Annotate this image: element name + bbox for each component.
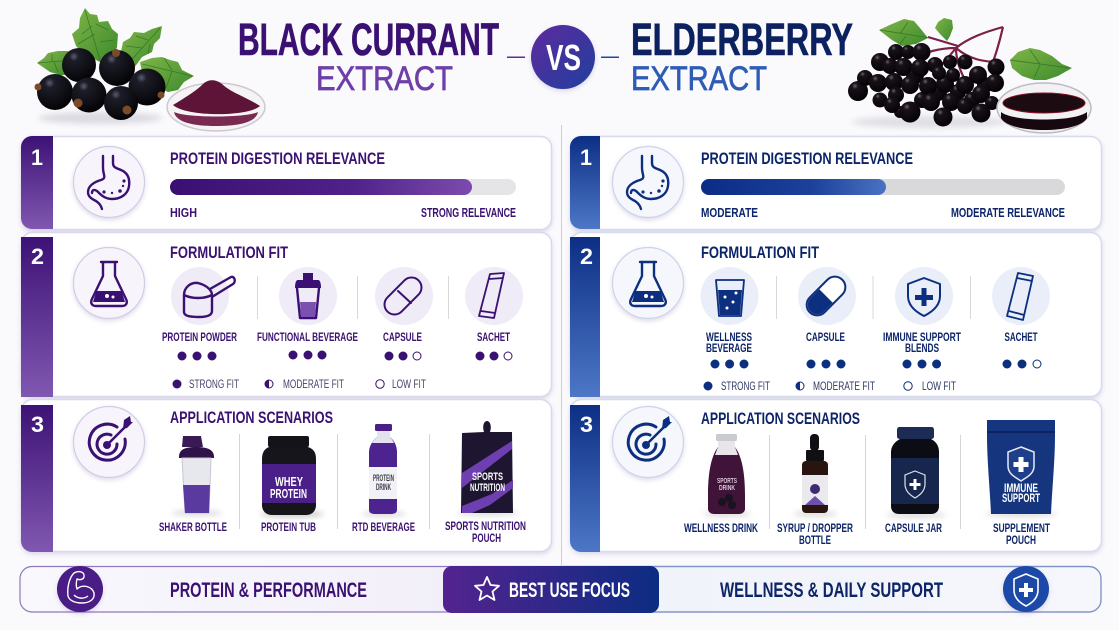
progress bar: moderate — [701, 179, 1065, 195]
product: sports nutrition pouch: POUCH — [472, 531, 501, 545]
icon: flask — [74, 248, 144, 318]
product: supplement pouch — [985, 420, 1057, 547]
legend: LOW FIT — [392, 377, 426, 391]
item: functional beverage — [257, 267, 358, 360]
number tab 2 — [570, 237, 600, 397]
product: RTD beverage: PROTEIN — [373, 473, 394, 484]
product: sports nutrition pouch: SPORTS NUTRITION — [445, 519, 526, 533]
VS badge: VS — [546, 37, 581, 78]
item: sachet — [992, 267, 1050, 368]
center tab: best use focus: BEST USE FOCUS — [509, 579, 630, 602]
product: syrup dropper bottle — [777, 434, 853, 547]
item: capsule: CAPSULE — [383, 330, 422, 344]
product: syrup dropper bottle: BOTTLE — [799, 533, 831, 547]
product: protein tub — [260, 436, 324, 534]
title: Black Currant Extract: BLACK CURRANT — [238, 14, 499, 65]
product: RTD beverage: DRINK — [376, 482, 391, 493]
legend: MODERATE FIT — [283, 377, 344, 391]
product: wellness drink: WELLNESS DRINK — [684, 521, 758, 535]
panel: elderberry application scenarios — [570, 400, 1102, 552]
number tab 3: 3 — [31, 412, 44, 437]
panel: black currant application scenarios — [21, 400, 552, 552]
bar label: strong relevance: STRONG RELEVANCE — [421, 205, 516, 220]
panel: black currant protein digestion relevance — [21, 136, 552, 230]
icon: flexed arm — [57, 566, 103, 612]
title: Black Currant Extract — [238, 14, 499, 98]
product: syrup dropper bottle: SYRUP / DROPPER — [777, 521, 853, 535]
number tab 1: 1 — [580, 145, 592, 170]
legend — [172, 377, 426, 391]
product: capsule jar: CAPSULE JAR — [885, 521, 942, 535]
bar label: high: HIGH — [170, 205, 197, 220]
product: shaker bottle — [159, 436, 227, 534]
item: protein powder — [162, 267, 237, 360]
legend: STRONG FIT — [721, 379, 770, 393]
product: sports nutrition pouch — [445, 421, 526, 545]
icon: stomach — [612, 146, 684, 218]
icon: shield — [1003, 566, 1049, 612]
item: capsule — [375, 267, 433, 360]
item: sachet: SACHET — [1004, 330, 1038, 344]
item: capsule: CAPSULE — [806, 330, 845, 344]
icon: target — [74, 406, 144, 478]
product: wellness drink: SPORTS — [717, 478, 737, 485]
product: supplement pouch: SUPPLEMENT — [993, 521, 1050, 535]
panel: black currant formulation fit — [21, 232, 552, 397]
center tab: best use focus — [443, 566, 659, 613]
product: wellness drink — [684, 434, 758, 535]
product: RTD beverage: RTD BEVERAGE — [352, 520, 415, 534]
item: sachet — [465, 267, 523, 360]
title: Black Currant Extract: EXTRACT — [316, 60, 453, 98]
number tab 2: 2 — [580, 244, 593, 269]
icon: target — [612, 406, 684, 478]
panel: elderberry formulation fit — [570, 232, 1102, 397]
item: wellness beverage: BEVERAGE — [706, 341, 752, 355]
best use focus bar — [20, 566, 1101, 613]
panel: elderberry protein digestion relevance — [570, 136, 1102, 230]
bar label: moderate relevance: MODERATE RELEVANCE — [951, 205, 1065, 220]
heading: FORMULATION FIT — [170, 243, 288, 262]
product: protein tub: WHEY — [275, 475, 303, 489]
icon: stomach — [74, 146, 144, 218]
heading: APPLICATION SCENARIOS — [701, 409, 860, 428]
item: protein powder: PROTEIN POWDER — [162, 330, 237, 344]
title: Elderberry Extract — [631, 14, 853, 98]
number tab 2: 2 — [31, 244, 44, 269]
product: sports nutrition pouch: SPORTS — [472, 471, 503, 483]
bar label: moderate: MODERATE — [701, 205, 758, 220]
legend: STRONG FIT — [189, 377, 239, 391]
product: protein tub: PROTEIN — [270, 487, 307, 501]
icon: flask — [612, 248, 684, 318]
label: wellness and daily support: WELLNESS & DAILY SUPPORT — [720, 579, 943, 602]
item: wellness beverage: WELLNESS — [706, 330, 752, 344]
title: Elderberry Extract: ELDERBERRY — [631, 14, 853, 65]
product: protein tub: PROTEIN TUB — [261, 520, 316, 534]
item: sachet: SACHET — [477, 330, 510, 344]
item: immune support blends: IMMUNE SUPPORT — [883, 330, 961, 344]
number tab 3: 3 — [580, 412, 593, 437]
heading: PROTEIN DIGESTION RELEVANCE — [701, 149, 913, 168]
item: functional beverage: FUNCTIONAL BEVERAGE — [257, 330, 358, 344]
legend: MODERATE FIT — [813, 379, 875, 393]
item: wellness beverage — [700, 267, 758, 368]
heading: APPLICATION SCENARIOS — [170, 408, 333, 427]
number tab 3 — [570, 405, 600, 552]
VS badge — [507, 25, 619, 89]
center vertical divider — [561, 125, 562, 565]
product: RTD beverage — [352, 424, 415, 534]
title: Elderberry Extract: EXTRACT — [631, 60, 767, 98]
number tab 1: 1 — [31, 145, 43, 170]
product: wellness drink: DRINK — [719, 485, 735, 492]
heading: PROTEIN DIGESTION RELEVANCE — [170, 149, 385, 168]
item: immune support blends — [883, 267, 961, 368]
number tab 2 — [21, 237, 53, 397]
label: protein and performance: PROTEIN & PERFORMANCE — [170, 579, 367, 602]
heading: FORMULATION FIT — [701, 243, 819, 262]
item: immune support blends: BLENDS — [905, 341, 939, 355]
number tab 1 — [570, 136, 600, 229]
product: shaker bottle: SHAKER BOTTLE — [159, 520, 227, 534]
number tab 3 — [21, 405, 53, 552]
product: sports nutrition pouch: NUTRITION — [470, 482, 505, 494]
number tab 1 — [21, 136, 53, 229]
image: black currants and powder — [34, 8, 265, 131]
product: supplement pouch: SUPPORT — [1002, 491, 1040, 505]
legend — [704, 379, 956, 393]
product: capsule jar — [885, 427, 946, 535]
product: supplement pouch: IMMUNE — [1004, 481, 1038, 495]
progress bar: high — [170, 179, 516, 195]
image: elderberries and syrup — [848, 18, 1091, 133]
product: supplement pouch: POUCH — [1006, 533, 1036, 547]
item: capsule — [798, 267, 856, 368]
legend: LOW FIT — [922, 379, 956, 393]
